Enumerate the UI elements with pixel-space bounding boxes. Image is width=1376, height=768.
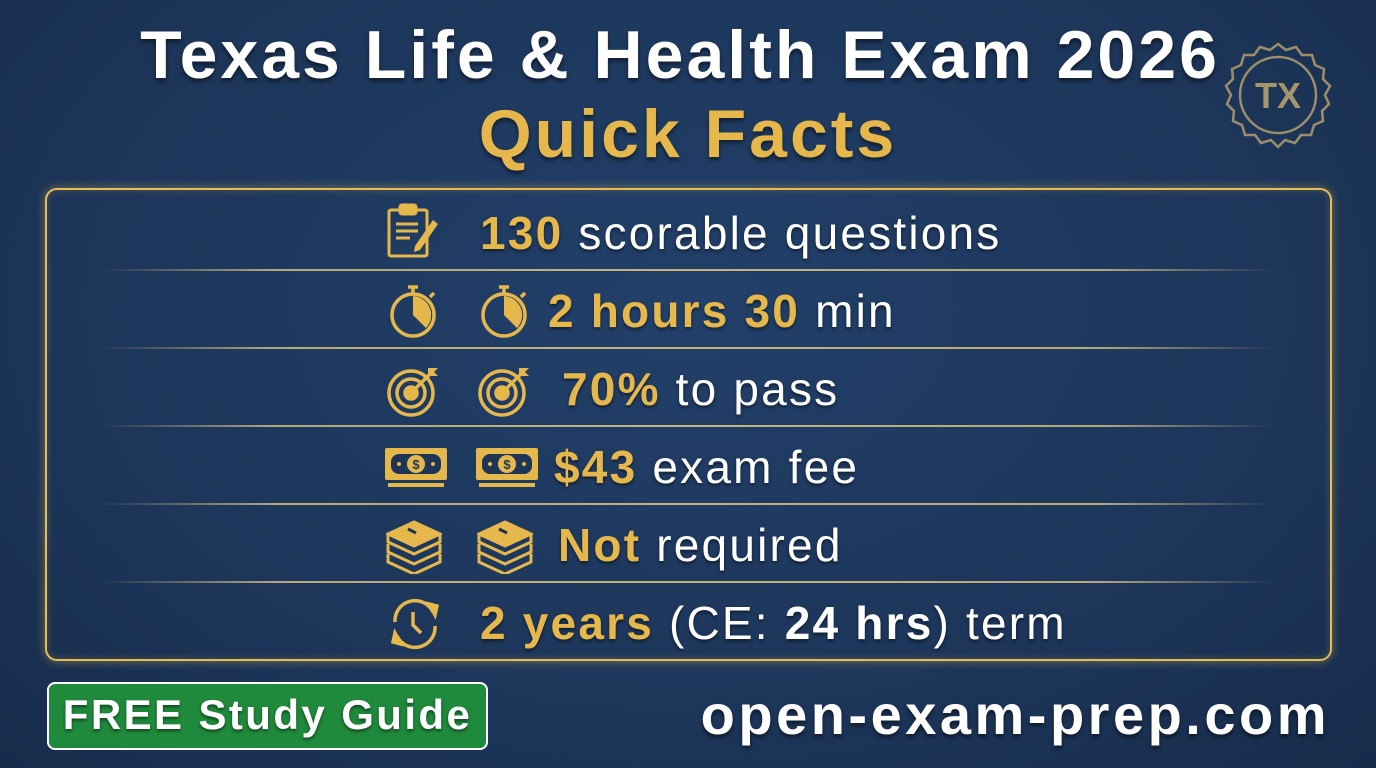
- icon: renewal clock: [390, 598, 440, 650]
- icon: clipboard: [388, 204, 438, 258]
- row 3 text: 70% to pass: [562, 363, 839, 415]
- icon: stopwatch x2: [390, 285, 436, 338]
- panel: quick facts: [45, 188, 1332, 661]
- title: Texas Life & Health Exam 2026: [140, 17, 1220, 93]
- button: free study guide: FREE Study Guide: [63, 691, 472, 738]
- row 5 text: Not required: [558, 519, 843, 571]
- row 6 text: 2 years (CE: 24 hrs) term: [480, 597, 1067, 649]
- icon: money x2: [385, 448, 447, 487]
- icon: target x2: [387, 368, 438, 417]
- text: $: [503, 457, 511, 472]
- subtitle: Quick Facts: [479, 96, 897, 172]
- icon: TX seal: TX: [1255, 75, 1301, 116]
- row 4 text: $43 exam fee: [554, 441, 859, 493]
- row 2 text: 2 hours 30 min: [548, 285, 896, 337]
- button: free study guide: [47, 682, 488, 750]
- icon: TX seal: [1224, 42, 1332, 149]
- icon: money x2: $: [412, 457, 420, 472]
- website url: open-exam-prep.com: [701, 683, 1330, 746]
- row 1 text: 130 scorable questions: [480, 207, 1002, 259]
- icon: books x2: [386, 520, 442, 574]
